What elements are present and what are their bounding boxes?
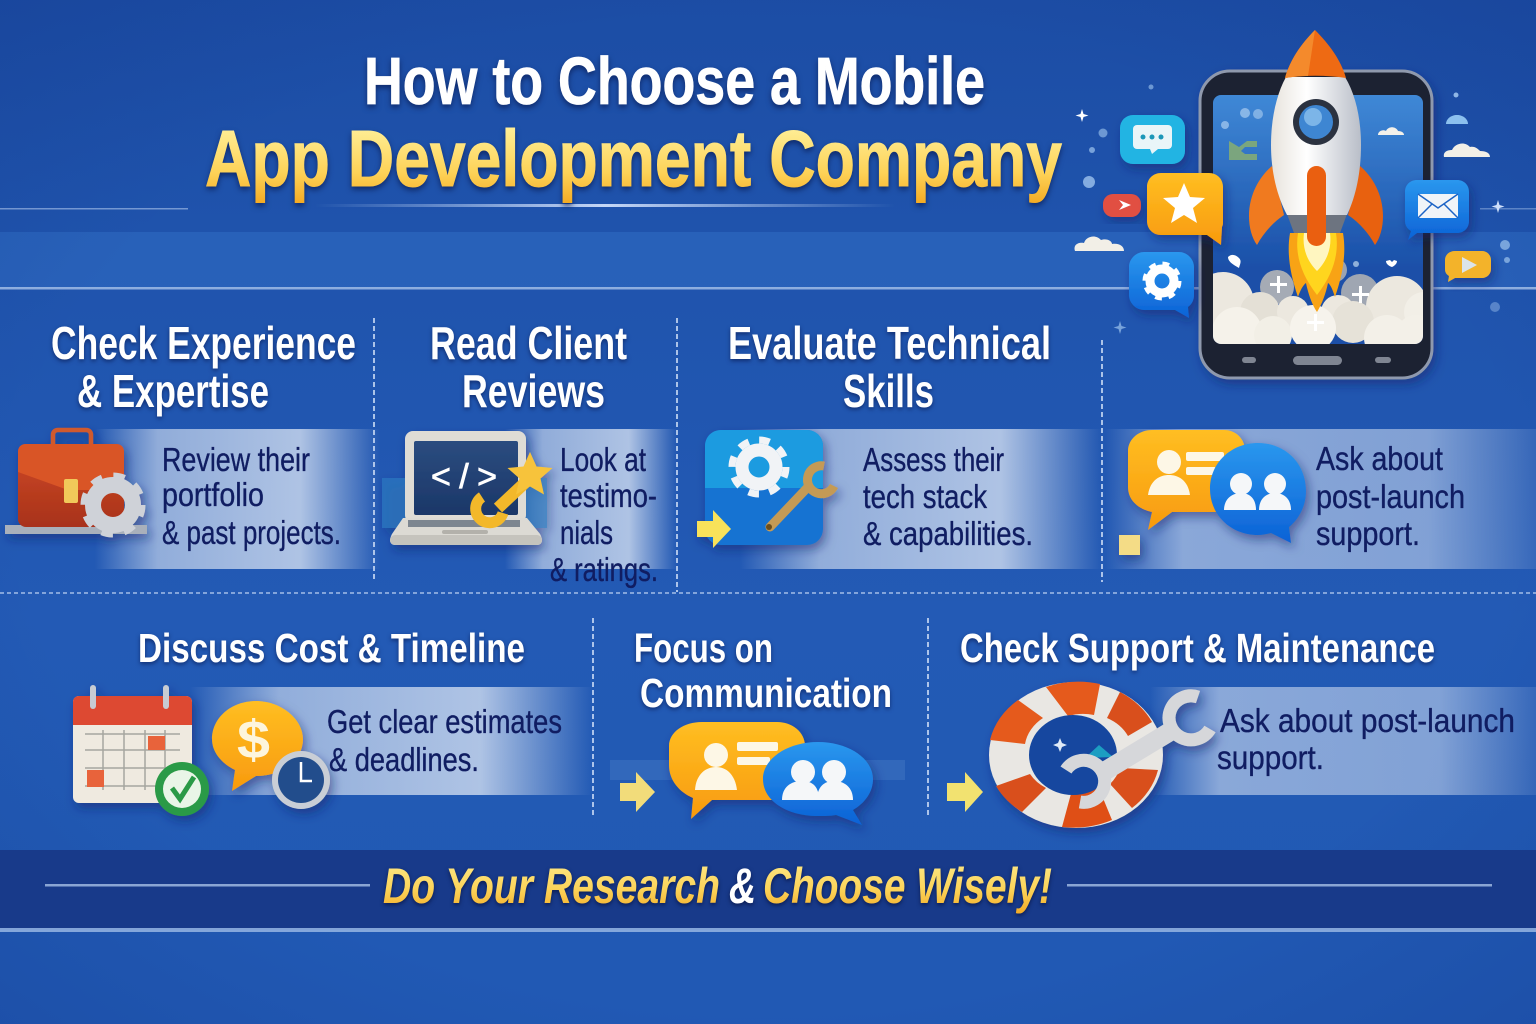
description: post-launch	[1316, 478, 1465, 515]
description: portfolio	[162, 476, 264, 513]
icon: star bubble	[1147, 173, 1223, 245]
description: Look at	[560, 441, 646, 478]
sparkles and dots	[1076, 84, 1510, 334]
icon: calendar with check	[73, 685, 209, 816]
panel background	[740, 429, 1102, 569]
footer slogan: Choose Wisely!	[763, 858, 1052, 914]
icon: lifebuoy with wrench	[989, 682, 1210, 828]
description	[327, 703, 562, 778]
footer slogan	[383, 858, 1052, 914]
rocket	[1249, 30, 1383, 312]
heading	[430, 317, 627, 417]
description: Ask about	[1316, 440, 1443, 477]
panel background	[1105, 429, 1536, 569]
heading: Focus on	[634, 625, 773, 671]
panel background	[95, 429, 380, 569]
icon: teal chat	[1120, 115, 1185, 164]
description	[550, 441, 658, 588]
description: nials	[560, 514, 613, 551]
description: support.	[1316, 515, 1420, 552]
footer slogan: &	[729, 858, 756, 914]
step: check support and maintenance	[947, 625, 1536, 828]
description	[1316, 440, 1465, 552]
heading	[51, 317, 356, 417]
description	[863, 441, 1033, 552]
description: Review their	[162, 441, 310, 478]
icon: yellow play bubble	[1445, 251, 1491, 282]
title: How to Choose a Mobile	[364, 44, 985, 119]
step: ask about post-launch support	[1105, 429, 1536, 569]
icon: chat bubbles with people	[1119, 430, 1306, 555]
heading: Communication	[640, 670, 892, 716]
heading: Read Client	[430, 317, 627, 369]
heading: & Expertise	[77, 365, 269, 417]
step: read client reviews	[382, 317, 677, 588]
description: Assess their	[863, 441, 1004, 478]
icon: laptop with code and wrench	[382, 431, 552, 545]
icon: chat bubbles with people	[669, 722, 873, 825]
heading: Skills	[843, 365, 934, 417]
heading: Check Experience	[51, 317, 356, 369]
phone	[1200, 71, 1432, 378]
title	[205, 44, 1062, 203]
heading: Check Support & Maintenance	[960, 625, 1435, 671]
description: Get clear estimates	[327, 703, 562, 740]
footer banner	[0, 850, 1536, 932]
step: discuss cost and timeline	[73, 625, 593, 816]
heading: Evaluate Technical	[728, 317, 1051, 369]
arrow	[947, 772, 983, 812]
description: & capabilities.	[863, 515, 1033, 552]
description: & deadlines.	[329, 741, 479, 778]
step: check experience and expertise	[5, 317, 380, 569]
icon: dollar bubble and clock: $	[237, 710, 270, 770]
icon: dollar bubble and clock	[212, 701, 330, 809]
description: & past projects.	[162, 514, 341, 551]
description	[1217, 702, 1515, 776]
icon: laptop with code and wrench: </>	[431, 458, 497, 496]
step: evaluate technical skills	[697, 317, 1102, 569]
icon: red play pill	[1103, 194, 1141, 217]
illustration: phone with rocket and app icons	[1075, 30, 1510, 378]
heading	[728, 317, 1051, 417]
description: testimo-	[560, 477, 657, 514]
screen details	[1221, 108, 1404, 268]
panel background	[1150, 687, 1536, 795]
description: tech stack	[863, 478, 987, 515]
icon: briefcase and gear	[5, 430, 147, 534]
panel background	[190, 687, 593, 795]
panel background	[505, 429, 677, 569]
footer slogan: Do Your Research	[383, 858, 720, 914]
clouds on screen	[1213, 262, 1423, 344]
description: support.	[1217, 739, 1324, 776]
icon: mail bubble	[1405, 180, 1469, 240]
heading: Reviews	[462, 365, 605, 417]
icon: gear bubble	[1129, 252, 1194, 318]
heading: Discuss Cost & Timeline	[138, 625, 525, 671]
description: & ratings.	[550, 551, 658, 588]
title: App Development Company	[205, 114, 1062, 203]
arrow	[620, 772, 655, 812]
icon: gear and wrench tile	[697, 430, 834, 548]
clouds	[1075, 115, 1490, 251]
heading	[634, 625, 892, 716]
step: focus on communication	[610, 625, 905, 825]
description	[162, 441, 341, 551]
glow streaks	[610, 760, 905, 780]
